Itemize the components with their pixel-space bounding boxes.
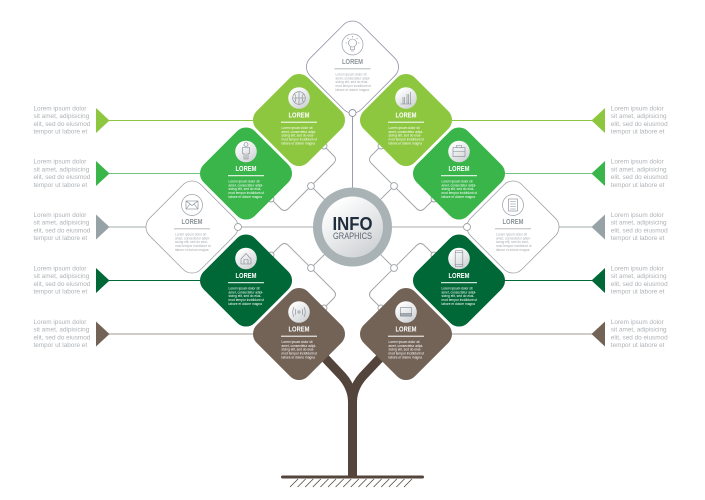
- arrows: right triangles: [592, 108, 605, 346]
- connector tree lines: [238, 113, 467, 311]
- panel: dark green right diamond: sicing elit, sed do eius-: [442, 294, 474, 298]
- panel: brown left diamond: LOREM: [288, 326, 310, 334]
- right text blocks: tempor ut labore et: [611, 342, 665, 349]
- panel: grey outline right diamond: [462, 176, 564, 278]
- right text blocks: tempor ut labore et: [611, 289, 665, 296]
- right text blocks: elit, sed do eiusmod: [611, 174, 668, 181]
- panel: green right diamond: mod tempor incididunt ut: [442, 191, 477, 195]
- panel: top outline diamond: [301, 16, 404, 118]
- left text blocks: sit amet, adipisicing: [34, 220, 90, 227]
- icon: person: [242, 142, 250, 159]
- panel: dark green right diamond: mod tempor incididunt ut: [442, 298, 477, 302]
- connector end nodes: [234, 110, 470, 230]
- left text blocks: Lorem ipsum dolor: [34, 106, 87, 112]
- left text blocks: tempor ut labore et: [34, 129, 87, 136]
- tree trunk and ground: [281, 358, 424, 487]
- left text blocks: Lorem ipsum dolor: [34, 266, 87, 272]
- left text blocks: elit, sed do eiusmod: [34, 121, 91, 128]
- icon: briefcase: [453, 146, 465, 156]
- panel: brown right diamond: mod tempor incididunt ut: [388, 352, 424, 356]
- panel: brown right diamond: amet, consectetur adipi-: [388, 344, 423, 348]
- panel: green right diamond: labore et dolore magna: [442, 195, 475, 199]
- right text blocks: elit, sed do eiusmod: [611, 227, 668, 234]
- left text blocks: sit amet, adipisicing: [34, 113, 90, 120]
- right text blocks: elit, sed do eiusmod: [611, 281, 668, 288]
- panel: top outline diamond: LOREM: [342, 59, 363, 66]
- center circle: info graphics: GRAPHICS: [333, 231, 372, 241]
- left text blocks: tempor ut labore et: [34, 235, 87, 242]
- right text blocks: Lorem ipsum dolor: [611, 159, 665, 166]
- panel: grey outline left diamond: sicing elit, sed do eius-: [175, 240, 208, 244]
- panel: grey outline right diamond: mod tempor incididunt ut: [496, 244, 532, 248]
- arrows: left triangles: [96, 108, 110, 346]
- left text blocks: tempor ut labore et: [34, 182, 87, 189]
- panel: grey outline left diamond: Lorem ipsum dolor sit: [175, 232, 206, 236]
- center circle: info graphics: INFO: [332, 214, 372, 234]
- panel: dark green right diamond: amet, consectetur adipi-: [442, 290, 476, 294]
- right text blocks: Lorem ipsum dolor: [611, 266, 665, 272]
- panel: grey outline left diamond: mod tempor incididunt ut: [175, 244, 211, 248]
- panel: brown right diamond: [355, 283, 457, 385]
- panel: grey outline right diamond: LOREM: [502, 219, 524, 226]
- panel: brown right diamond: labore et dolore magna: [388, 355, 422, 359]
- left text blocks: [34, 106, 91, 349]
- right text blocks: [611, 106, 668, 349]
- panel: grey outline left diamond: LOREM: [182, 219, 203, 226]
- panel: light green right diamond: labore et dolore magna: [388, 141, 422, 145]
- right text blocks: sit amet, adipisicing: [611, 166, 667, 173]
- right text blocks: Lorem ipsum dolor: [611, 212, 665, 219]
- panel: green right diamond: amet, consectetur adipi-: [442, 183, 476, 187]
- panel: green left diamond: Lorem ipsum dolor sit: [228, 180, 260, 184]
- panel: grey outline right diamond: sicing elit, sed do eius-: [496, 240, 529, 244]
- left text blocks: elit, sed do eiusmod: [34, 281, 91, 288]
- icon: light bulb: [346, 36, 360, 51]
- icon: laptop: [400, 308, 412, 316]
- panel: dark green left diamond: LOREM: [236, 273, 257, 280]
- panel: light green right diamond: sicing elit, sed do eius-: [388, 134, 421, 138]
- panel: light green right diamond: amet, consectetur adipi-: [388, 130, 423, 134]
- icon: envelope: [186, 201, 198, 209]
- left text blocks: elit, sed do eiusmod: [34, 174, 91, 181]
- panel: green left diamond: sicing elit, sed do eius-: [228, 187, 261, 191]
- right text blocks: elit, sed do eiusmod: [611, 334, 668, 341]
- left text blocks: sit amet, adipisicing: [34, 166, 90, 173]
- panel: brown left diamond: mod tempor incididunt ut: [282, 352, 317, 356]
- panel: light green right diamond: LOREM: [396, 112, 417, 120]
- panel: dark green right diamond: labore et dolore magna: [442, 302, 475, 306]
- panel: dark green left diamond: Lorem ipsum dolor sit: [228, 286, 260, 290]
- panel: light green left diamond: mod tempor incididunt ut: [282, 138, 317, 142]
- panel: grey outline left diamond: [141, 176, 243, 278]
- panel: green right diamond: [408, 122, 510, 225]
- left text blocks: Lorem ipsum dolor: [34, 159, 87, 166]
- panel: grey outline left diamond: labore et dolore magna: [175, 248, 209, 252]
- panel: green left diamond: amet, consectetur adipi-: [228, 183, 263, 187]
- panel: green left diamond: mod tempor incididunt ut: [228, 191, 264, 195]
- panel: light green left diamond: labore et dolore magna: [282, 141, 315, 145]
- right text blocks: tempor ut labore et: [611, 235, 665, 242]
- panel: green right diamond: LOREM: [448, 166, 470, 173]
- panel: light green right diamond: mod tempor incididunt ut: [388, 138, 424, 142]
- panel: brown left diamond: amet, consectetur adipi-: [282, 344, 316, 348]
- panel: dark green left diamond: mod tempor incididunt ut: [228, 298, 264, 302]
- panel: dark green left diamond: sicing elit, sed do eius-: [228, 294, 261, 298]
- icon: wireless signal: [293, 307, 305, 317]
- panel: dark green left diamond: [195, 229, 297, 332]
- panel: top outline diamond: Lorem ipsum dolor sit: [336, 72, 367, 76]
- panel: light green right diamond: Lorem ipsum dolor sit: [388, 126, 420, 130]
- panel: brown right diamond: sicing elit, sed do eius-: [388, 348, 421, 352]
- panel: brown right diamond: LOREM: [396, 326, 417, 334]
- panel: light green left diamond: amet, consectetur adipi-: [282, 130, 316, 134]
- panel: light green left diamond: Lorem ipsum dolor sit: [282, 126, 313, 130]
- left text blocks: elit, sed do eiusmod: [34, 334, 91, 341]
- panel: grey outline right diamond: labore et dolore magna: [496, 248, 530, 252]
- right text blocks: sit amet, adipisicing: [611, 220, 667, 227]
- panel: green right diamond: sicing elit, sed do eius-: [442, 187, 474, 191]
- right text blocks: sit amet, adipisicing: [611, 327, 667, 334]
- panel: grey outline left diamond: amet, consectetur adipi-: [175, 236, 210, 240]
- left text blocks: sit amet, adipisicing: [34, 327, 90, 334]
- panel: grey outline right diamond: Lorem ipsum dolor sit: [496, 232, 527, 236]
- panel: top outline diamond: labore et dolore magna: [336, 88, 369, 92]
- panel: light green left diamond: sicing elit, sed do eius-: [282, 134, 314, 138]
- panel: light green left diamond: LOREM: [288, 112, 310, 120]
- right text blocks: tempor ut labore et: [611, 129, 665, 136]
- panel: top outline diamond: sicing elit, sed do eius-: [336, 80, 368, 84]
- left text blocks: Lorem ipsum dolor: [34, 212, 87, 219]
- left text blocks: sit amet, adipisicing: [34, 273, 90, 280]
- panel: brown left diamond: sicing elit, sed do eius-: [282, 348, 314, 352]
- panel: brown left diamond: labore et dolore magna: [282, 355, 315, 359]
- horizontal leader lines: [109, 120, 596, 334]
- icon: bar chart: [400, 92, 412, 104]
- panel: dark green right diamond: [408, 229, 510, 332]
- panel: light green right diamond: [355, 69, 457, 171]
- panel: green right diamond: Lorem ipsum dolor sit: [442, 180, 473, 184]
- icon: smartphone: [455, 250, 463, 266]
- right text blocks: sit amet, adipisicing: [611, 113, 667, 120]
- right text blocks: Lorem ipsum dolor: [611, 106, 665, 112]
- panel: top outline diamond: mod tempor incididunt ut: [336, 84, 371, 88]
- right text blocks: tempor ut labore et: [611, 182, 665, 189]
- left text blocks: tempor ut labore et: [34, 342, 87, 349]
- right text blocks: elit, sed do eiusmod: [611, 121, 668, 128]
- center circle: info graphics: [313, 188, 392, 266]
- panel: dark green left diamond: amet, consectetur adipi-: [228, 290, 263, 294]
- panel: light green left diamond: [248, 69, 350, 171]
- panel: green left diamond: [195, 122, 297, 225]
- icon: house: [241, 254, 251, 264]
- panel: brown right diamond: Lorem ipsum dolor sit: [388, 340, 420, 344]
- panel: dark green left diamond: labore et dolore magna: [228, 302, 262, 306]
- right text blocks: sit amet, adipisicing: [611, 273, 667, 280]
- left text blocks: Lorem ipsum dolor: [34, 319, 87, 326]
- panel: green left diamond: LOREM: [236, 166, 257, 173]
- panel: grey outline right diamond: amet, consectetur adipi-: [496, 236, 531, 240]
- panel: brown left diamond: [248, 283, 350, 385]
- right text blocks: Lorem ipsum dolor: [611, 319, 665, 326]
- panel: brown left diamond: Lorem ipsum dolor sit: [282, 340, 313, 344]
- panel: dark green right diamond: Lorem ipsum dolor sit: [442, 286, 473, 290]
- left text blocks: tempor ut labore et: [34, 289, 87, 296]
- icon: document: [508, 199, 518, 211]
- icon: globe ball: [293, 92, 305, 104]
- left text blocks: elit, sed do eiusmod: [34, 227, 91, 234]
- panel: green left diamond: labore et dolore magna: [228, 195, 262, 199]
- panel: top outline diamond: amet, consectetur adipi-: [336, 76, 370, 80]
- panel: dark green right diamond: LOREM: [448, 273, 470, 280]
